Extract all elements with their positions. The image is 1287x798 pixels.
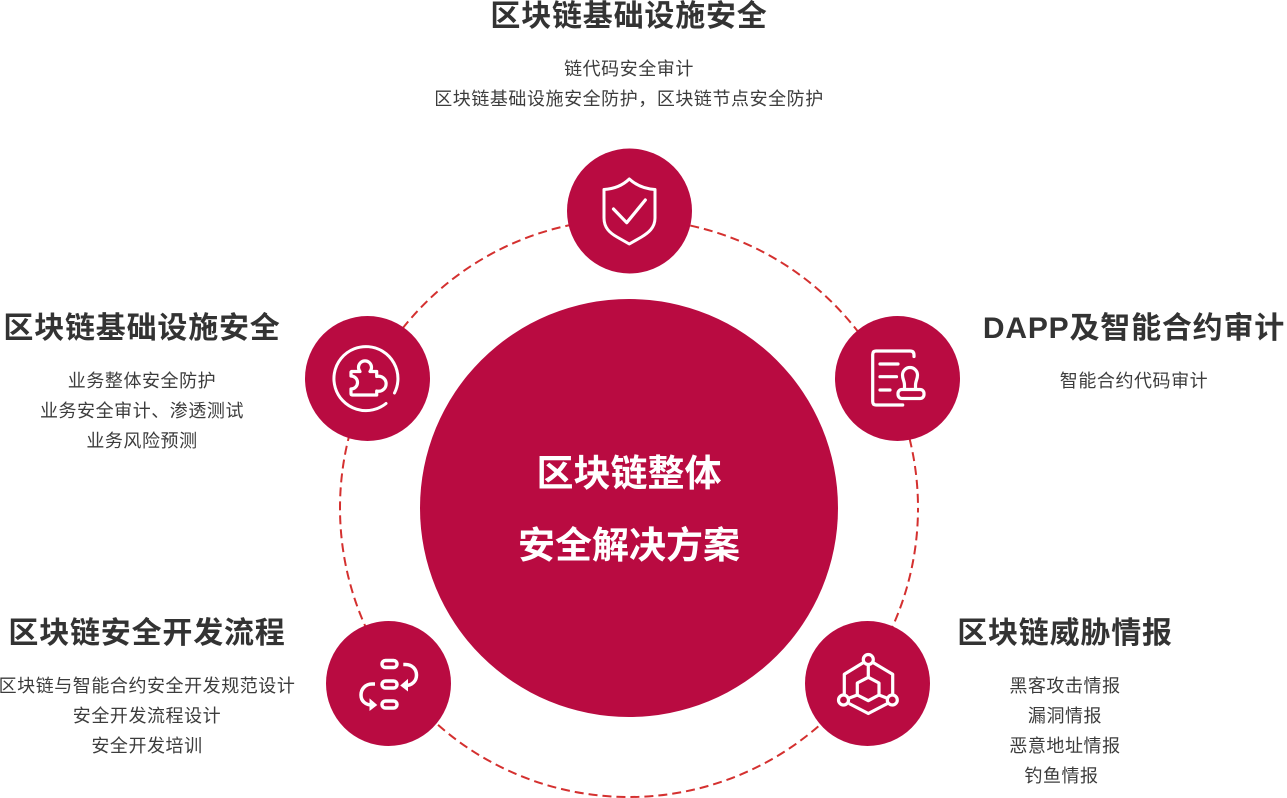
icon: shield with check	[567, 148, 692, 274]
panel: secure development process: 区块链安全开发流程	[8, 617, 286, 650]
panel: threat intelligence	[957, 617, 1173, 786]
panel: top infrastructure security: 区块链基础设施安全	[490, 0, 768, 33]
dashed ring	[340, 219, 918, 797]
panel: DAPP audit: 智能合约代码审计	[1060, 371, 1208, 391]
central title: 区块链整体	[536, 453, 722, 494]
panel: DAPP audit: DAPP及智能合约审计	[983, 312, 1285, 345]
panel: top infrastructure security	[434, 0, 824, 109]
panel: secure development process: 安全开发流程设计	[73, 706, 221, 726]
panel: left infrastructure security: 业务安全审计、渗透测试	[40, 401, 244, 421]
panel: threat intelligence: 黑客攻击情报	[1009, 676, 1121, 696]
panel: threat intelligence: 漏洞情报	[1028, 706, 1102, 726]
panel: threat intelligence: 恶意地址情报	[1009, 736, 1121, 756]
central title	[518, 453, 740, 566]
panel: secure development process	[0, 616, 295, 756]
panel: threat intelligence: 区块链威胁情报	[957, 617, 1173, 650]
panel: DAPP audit	[983, 312, 1285, 391]
panel: secure development process: 区块链与智能合约安全开发规范设计	[0, 676, 295, 696]
panel: left infrastructure security	[3, 312, 281, 451]
panel: left infrastructure security: 业务整体安全防护	[68, 371, 216, 391]
panel: secure development process: 安全开发培训	[91, 736, 203, 756]
icon: process flow	[326, 621, 451, 746]
panel: left infrastructure security: 区块链基础设施安全	[3, 312, 281, 345]
icon: document with stamp	[835, 316, 960, 441]
icon: puzzle piece	[305, 316, 430, 441]
panel: top infrastructure security: 链代码安全审计	[564, 59, 694, 79]
panel: threat intelligence: 钓鱼情报	[1024, 766, 1099, 786]
central title: 安全解决方案	[518, 525, 740, 566]
panel: left infrastructure security: 业务风险预测	[86, 431, 198, 451]
panel: top infrastructure security: 区块链基础设施安全防护，区块链节点安全防护	[434, 89, 824, 109]
central circle	[420, 299, 838, 717]
icon: hexagon network	[805, 621, 930, 746]
